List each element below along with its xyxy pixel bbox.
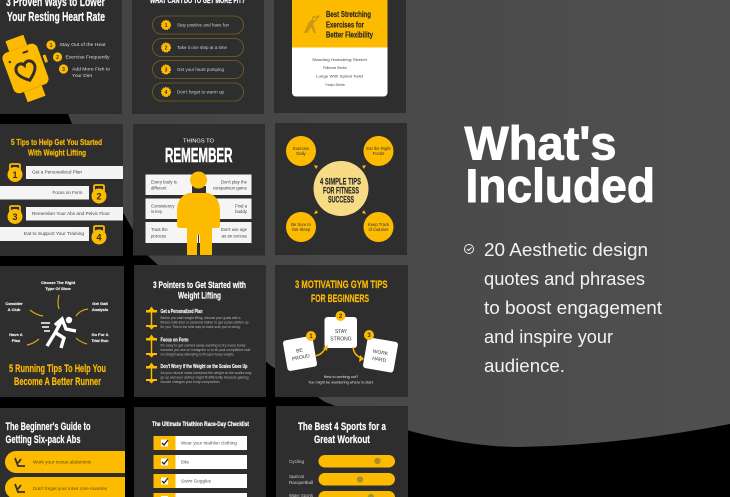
pill text: Don't forget to warm up — [177, 90, 225, 94]
circle text: Get Sleep — [292, 227, 311, 232]
bar text — [33, 460, 107, 491]
icon: person — [177, 172, 220, 255]
footer text: You might be wondering where to start. — [308, 380, 374, 384]
sport labels: Cycling — [289, 459, 305, 464]
diagram labels: Choose The Right — [41, 280, 76, 285]
centre text: SUCCESS — [328, 194, 354, 206]
list: heart rate tips: 1 — [50, 43, 53, 49]
table text: Don't use age — [221, 227, 248, 232]
bars — [5, 451, 125, 497]
card text — [290, 329, 389, 364]
pointer text: run straight away attempting to lift super heavy weights. — [160, 352, 235, 356]
heading: pointers — [153, 280, 246, 302]
card text: PROUD — [292, 353, 311, 363]
card heading: Exercises for — [326, 20, 364, 30]
pill text: Take it one step at a time — [177, 45, 228, 50]
table text — [151, 180, 248, 238]
panel: things to remember — [133, 124, 265, 256]
heading: six-pack abs: Getting Six-pack Abs — [6, 434, 80, 446]
heading: things to remember: THINGS TO — [183, 138, 215, 144]
icon: stretching figure — [304, 15, 320, 33]
pill text: Get your heart pumping — [177, 67, 225, 72]
panel: weight lifting tips — [0, 124, 123, 256]
panel: motivating gym tips: 3 — [367, 333, 371, 339]
panel: get more fit — [132, 0, 264, 114]
heading: things to remember: REMEMBER — [165, 145, 233, 167]
pill list — [152, 16, 244, 101]
panel: simple fitness tips — [275, 123, 407, 255]
diagram labels — [5, 280, 109, 343]
centre text: 4 SIMPLE TIPS — [320, 176, 361, 188]
icon: check circle — [464, 244, 474, 254]
checklist rows — [154, 436, 247, 497]
heading: gym tips — [295, 279, 388, 305]
circle text: Exercise — [293, 146, 310, 151]
card list: Piriformis Stretch — [323, 65, 347, 70]
table text: different — [151, 186, 167, 190]
pointer text: As your muscle mass increases the weight on the scales may — [160, 371, 252, 375]
card heading: Better Flexibility — [326, 30, 373, 40]
heading: running tips — [9, 363, 106, 388]
number badges — [306, 311, 374, 341]
panel: motivating gym tips: 2 — [339, 314, 343, 320]
table text: buddy — [235, 209, 248, 214]
card — [292, 0, 388, 96]
list: heart rate tips: Exercise Frequently — [66, 54, 110, 60]
diagram labels: Get Gait — [92, 301, 108, 306]
diagram labels: Have A — [9, 332, 23, 337]
icons: dumbbells — [146, 306, 157, 384]
table text: is key — [151, 209, 163, 214]
table text: Don't play the — [221, 180, 248, 184]
diagram labels: Plan — [12, 338, 21, 343]
sport labels: Squash and — [289, 474, 304, 479]
bar text: Don't forget your inner core muscles — [33, 486, 107, 491]
panel: resting heart rate — [0, 0, 122, 114]
diagram labels: Type Of Shoe — [45, 286, 72, 291]
pointer text — [160, 309, 252, 384]
body text: to boost engagement — [484, 297, 662, 318]
icons: kettlebells: 3 — [12, 212, 18, 222]
heading: gym tips: FOR BEGINNERS — [311, 293, 369, 305]
list: heart rate tips: 3 — [62, 67, 65, 73]
diagram labels: Consider — [5, 301, 23, 306]
card text: WORK — [372, 349, 389, 357]
heading: best sports: Great Workout — [314, 434, 370, 446]
pill text: Stay positive and have fun — [177, 22, 230, 28]
circle text: Eat the Right — [366, 146, 391, 151]
heading: running tips: Become A Better Runner — [14, 376, 101, 388]
panel: six-pack abs — [0, 408, 125, 497]
pointer text: exercise you see on Instagram or to let your competitive side — [160, 348, 251, 352]
sport labels: Racquetball — [289, 480, 313, 485]
panel: running tips — [0, 266, 124, 397]
heading: best sports: The Best 4 Sports for a — [298, 421, 387, 433]
heading: pointers: Weight Lifting — [178, 290, 221, 302]
icon: smartwatch with heart — [0, 30, 59, 105]
list: heart rate tips: Your Diet — [72, 73, 93, 78]
list: heart rate tips: 2 — [56, 55, 59, 61]
pointer text: for you. This is the best way to make sure you're doing. — [160, 325, 241, 329]
icons: sit-up — [15, 458, 25, 492]
card heading — [326, 10, 373, 40]
heading: What's Included: Included — [466, 159, 655, 212]
footer text: New to working out? — [324, 375, 358, 379]
pointer text: muscle changes your body composition. — [160, 380, 221, 384]
heading: What's Included: What's — [464, 116, 616, 170]
panel: motivating gym tips — [275, 265, 408, 397]
bar text: Work your rectus abdominis — [33, 460, 91, 464]
pill text — [165, 22, 230, 96]
list: heart rate tips: Stay Out of the Heat — [60, 42, 106, 47]
sport labels — [289, 459, 313, 497]
card list — [312, 57, 367, 87]
arrows — [315, 347, 362, 358]
body text: quotes and phrases — [484, 268, 645, 289]
card heading: Best Stretching — [326, 10, 371, 19]
icons: kettlebells: 1 — [12, 170, 18, 180]
pill text: 2 — [165, 45, 168, 51]
pointer text: Focus on Form — [160, 338, 189, 344]
checklist text: Wear your triathlon clothing — [181, 440, 238, 446]
checklist text: Bike — [181, 460, 190, 464]
panel: best sports — [276, 406, 408, 497]
footer text — [308, 375, 374, 384]
centre text: FOR FITNESS — [323, 186, 359, 196]
pill text: 4 — [165, 90, 168, 96]
body text: and inspire your — [484, 326, 613, 347]
heading: six-pack abs: The Beginner's Guide to — [6, 421, 91, 433]
list: heart rate tips — [46, 40, 110, 78]
table text: as an excuse — [222, 234, 248, 238]
heading: What's Included — [464, 116, 655, 212]
heading: weight lifting tips: With Weight Lifting — [28, 148, 86, 158]
table rows — [146, 174, 252, 243]
list: heart rate tips: Add More Fish to — [72, 66, 110, 72]
icon: runner — [41, 317, 76, 348]
card list: Lunge With Spinal Twist — [316, 74, 364, 78]
panel: triathlon checklist — [134, 407, 266, 497]
heading: best sports — [298, 421, 387, 446]
card list: Triceps Stretch — [325, 82, 345, 87]
circle text: Be Sure to — [291, 222, 312, 227]
pointer text: Don't Worry if the Weight on the Scales Goes Up — [160, 364, 248, 370]
diagram labels: Go For A — [92, 332, 109, 337]
heading: weight lifting tips: 5 Tips to Help Get You Started — [11, 137, 102, 147]
heading: weight lifting tips — [11, 137, 102, 158]
diagram labels: Analysis — [92, 307, 109, 312]
diagram circles — [286, 136, 394, 242]
rating bars — [318, 455, 395, 497]
pointer text: Before you start weight lifting, discuss your goals with a — [160, 316, 241, 320]
circle text: Daily — [296, 151, 307, 156]
white rows — [0, 166, 123, 241]
pill text: 3 — [165, 67, 168, 73]
heading: pointers: 3 Pointers to Get Started with — [153, 280, 246, 291]
heading: running tips: 5 Running Tips To Help You — [9, 363, 106, 375]
heading: checklist: The Ultimate Triathlon Race-Day Checklist — [152, 421, 250, 428]
pointer text: It's easy to get carried away wanting to try every funky — [160, 344, 246, 348]
circle text: Keep Track — [368, 222, 390, 227]
table text: comparison game — [213, 186, 248, 190]
row text: Remember Your Abs and Pelvic Floor — [32, 211, 111, 216]
body text: audience. — [484, 355, 565, 376]
table text: process — [151, 234, 166, 238]
icons: kettlebells: 2 — [96, 192, 102, 202]
row text — [24, 170, 111, 236]
checklist text: Swim Goggles — [181, 478, 211, 484]
card text: STAY — [335, 329, 348, 335]
table text: Trust the — [151, 227, 168, 232]
body text — [484, 239, 662, 376]
circle text: of Calories — [368, 227, 389, 232]
panel: stretching card — [274, 0, 406, 113]
panel: motivating gym tips: 1 — [309, 334, 313, 340]
table text: Consistency — [151, 204, 175, 208]
body text: 20 Aesthetic design — [484, 239, 648, 260]
pointer text: go up and your clothes might fit differently because gaining — [160, 376, 249, 380]
table text: Every body is — [151, 180, 177, 184]
diagram labels: Trial Run — [91, 338, 109, 343]
row text: Eat to Support Your Training — [24, 231, 85, 236]
arrows — [27, 295, 88, 345]
row text: Get a Personalized Plan — [32, 170, 83, 174]
heading: resting heart rate: Your Resting Heart Rate — [7, 10, 105, 24]
pointer text: Get a Personalized Plan — [160, 309, 202, 315]
panel: weight lifting pointers — [134, 265, 266, 397]
heading: resting heart rate — [6, 0, 105, 24]
pointer text: fitness instructor or personal trainer to get a plan written up — [160, 320, 249, 324]
centre text — [320, 176, 361, 206]
card list: Standing Hamstring Stretch — [312, 57, 367, 62]
table text: Find a — [235, 204, 248, 208]
cards — [283, 317, 398, 373]
card text: BE — [296, 347, 304, 355]
icons: kettlebells: 4 — [96, 232, 102, 242]
pill text: 1 — [165, 23, 168, 29]
circle text: Foods — [373, 151, 384, 156]
circle text — [291, 146, 391, 232]
icons: kettlebells — [8, 164, 106, 244]
heading: gym tips: 3 MOTIVATING GYM TIPS — [295, 279, 388, 291]
card text: HARD — [372, 356, 387, 364]
heading: things to remember — [165, 138, 233, 167]
checklist text — [181, 440, 238, 484]
heading: six-pack abs — [6, 421, 91, 446]
row text: Focus on Form — [52, 190, 83, 195]
diagram labels: A Club — [8, 307, 21, 312]
card text: STRONG — [330, 336, 352, 342]
check boxes — [161, 440, 168, 497]
